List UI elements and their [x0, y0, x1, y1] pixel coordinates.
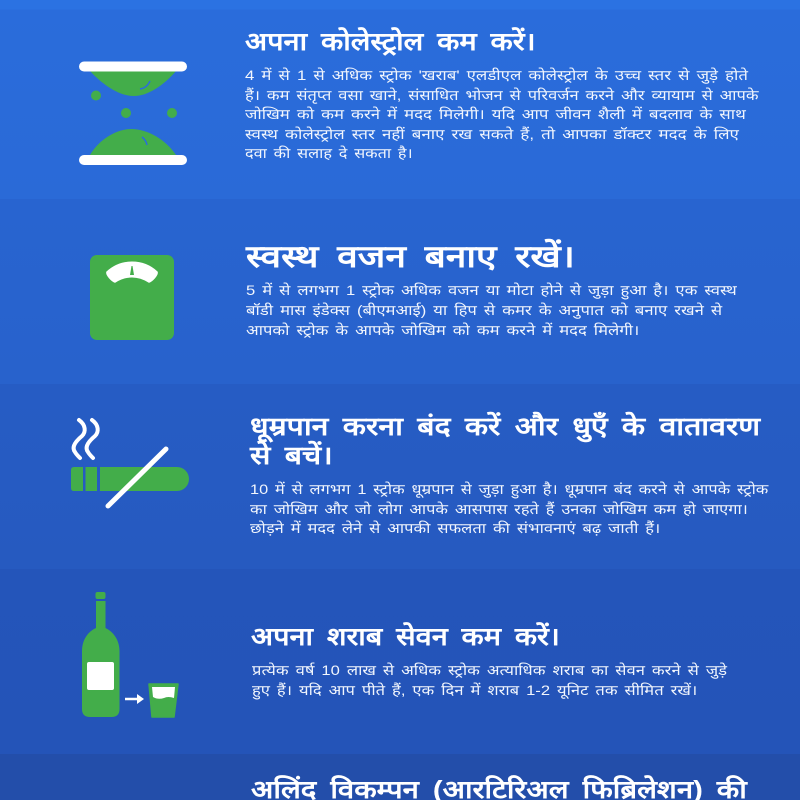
panel: reduce alcohol [0, 569, 800, 754]
text: reduce alcohol body: हुए हैं। यदि आप पीते हैं, एक दिन में शराब 1-2 यूनिट तक सीमित रखें। [252, 682, 697, 698]
panel: atrial fibrillation [0, 754, 800, 800]
text: healthy weight body [246, 282, 737, 338]
heading: reduce alcohol: अपना शराब सेवन कम करें। [251, 623, 560, 651]
heading: stop smoking: धूम्रपान करना बंद करें और धुएँ के वातावरण [250, 413, 760, 441]
panel: stop smoking [0, 384, 800, 569]
text: cholesterol body: हैं। कम संतृप्त वसा खाने, संसाधित भोजन से परिवर्जन करने और व्यायाम से आपके [245, 87, 759, 103]
heading: cholesterol: अपना कोलेस्ट्रोल कम करें। [245, 28, 536, 56]
icon: weighing scale [90, 255, 174, 340]
icon: cholesterol hourglass [79, 62, 187, 165]
text: cholesterol body [245, 67, 759, 161]
text: reduce alcohol body [252, 662, 728, 700]
panel: healthy weight [0, 199, 800, 384]
heading: stop smoking [249, 412, 762, 470]
text: healthy weight body: 5 में से लगभग 1 स्ट्रोक अधिक वजन या मोटा होने से जुड़ा हुआ है। एक स्वस्थ [246, 282, 737, 298]
text: stop smoking body: 10 में से लगभग 1 स्ट्रोक धूम्रपान से जुड़ा हुआ है। धूम्रपान बंद करने से आपके स्ट्रोक [250, 481, 768, 497]
text: cholesterol body: जोखिम को कम करने में मदद मिलेगी। यदि आप जीवन शैली में बदलाव के साथ [245, 106, 746, 122]
text: reduce alcohol body: प्रत्येक वर्ष 10 लाख से अधिक स्ट्रोक अत्याधिक शराब का सेवन करने से जुड़े [252, 662, 727, 678]
text: stop smoking body: छोड़ने में मदद लेने से आपकी सफलता की संभावनाएं बढ़ जाती हैं। [250, 520, 660, 536]
text: cholesterol body: 4 में से 1 से अधिक स्ट्रोक 'खराब' एलडीएल कोलेस्ट्रोल के उच्च स्तर से जुड़े होते [245, 67, 748, 83]
heading: healthy weight: स्वस्थ वजन बनाए रखें। [246, 238, 575, 274]
heading: stop smoking: से बचें। [250, 442, 333, 470]
panel: cholesterol [0, 0, 800, 199]
text: stop smoking body [250, 481, 769, 536]
text: cholesterol body: स्वस्थ कोलेस्ट्रोल स्तर नहीं बनाए रख सकते हैं, तो आपका डॉक्टर मदद के लिए [245, 126, 739, 142]
icon: no smoking cigarette [71, 418, 189, 508]
icon: bottle and glass [82, 592, 179, 718]
text: cholesterol body: दवा की सलाह दे सकता है। [245, 145, 413, 161]
text: healthy weight body: आपको स्ट्रोक के आपके जोखिम को कम करने में मदद मिलेगी। [246, 322, 639, 338]
text: healthy weight body: बॉडी मास इंडेक्स (बीएमआई) या हिप से कमर के अनुपात को बनाए रखने से [246, 302, 722, 318]
text: stop smoking body: का जोखिम और जो लोग आपके आसपास रहते हैं उनका जोखिम कम हो जाएगा। [250, 501, 748, 517]
